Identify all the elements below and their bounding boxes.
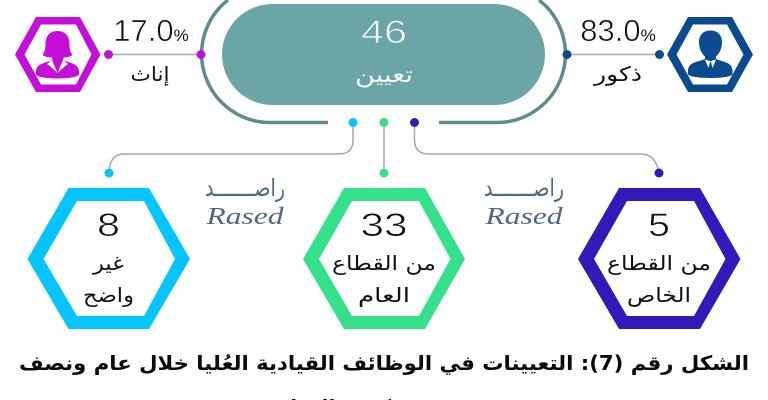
central pill: total appointments: 46 bbox=[361, 14, 407, 50]
watermark: Rased left: Rased bbox=[205, 204, 285, 230]
panel: private sector hexagon: الخاص bbox=[627, 283, 691, 307]
panel: private sector hexagon bbox=[578, 188, 740, 329]
watermark: Rased left bbox=[205, 174, 285, 230]
connector: female share bbox=[104, 50, 206, 59]
male statistic bbox=[580, 13, 656, 86]
male statistic: 83.0% bbox=[580, 13, 656, 48]
figure caption bbox=[19, 351, 749, 400]
icon: male hexagon bbox=[667, 17, 753, 92]
male statistic: ذكور bbox=[593, 62, 642, 86]
panel: public sector hexagon: العام bbox=[358, 283, 410, 307]
icon: female hexagon bbox=[15, 17, 100, 92]
watermark: Rased right bbox=[484, 174, 564, 230]
female statistic bbox=[113, 13, 189, 87]
panel: public sector hexagon bbox=[303, 188, 465, 329]
panel: public sector hexagon: 33 bbox=[360, 207, 408, 243]
panel: unclear sector hexagon bbox=[28, 188, 190, 329]
watermark: Rased right: Rased bbox=[484, 204, 564, 230]
connector: public sector bbox=[380, 118, 388, 178]
female statistic: 17.0% bbox=[113, 13, 189, 48]
connector: unclear sector bbox=[104, 118, 358, 178]
panel: private sector hexagon: 5 bbox=[648, 207, 670, 243]
watermark: Rased left: راصـــــــد bbox=[205, 174, 285, 202]
panel: private sector hexagon: من القطاع bbox=[607, 251, 711, 275]
connector: private sector bbox=[410, 118, 664, 178]
connector: male share bbox=[562, 50, 664, 59]
panel: unclear sector hexagon: غير bbox=[92, 251, 124, 275]
female statistic: إناث bbox=[130, 62, 170, 87]
central pill: total appointments bbox=[222, 4, 545, 105]
central pill: total appointments: تعيين bbox=[355, 63, 413, 88]
panel: public sector hexagon: من القطاع bbox=[332, 251, 436, 275]
watermark: Rased right: راصـــــــد bbox=[484, 174, 564, 202]
outer ring around central pill bbox=[202, 0, 565, 122]
panel: unclear sector hexagon: 8 bbox=[97, 207, 120, 243]
panel: unclear sector hexagon: واضح bbox=[83, 283, 134, 307]
figure caption: الشكل رقم (7): التعيينات في الوظائف القيادية العُليا خلال عام ونصف bbox=[19, 351, 749, 376]
